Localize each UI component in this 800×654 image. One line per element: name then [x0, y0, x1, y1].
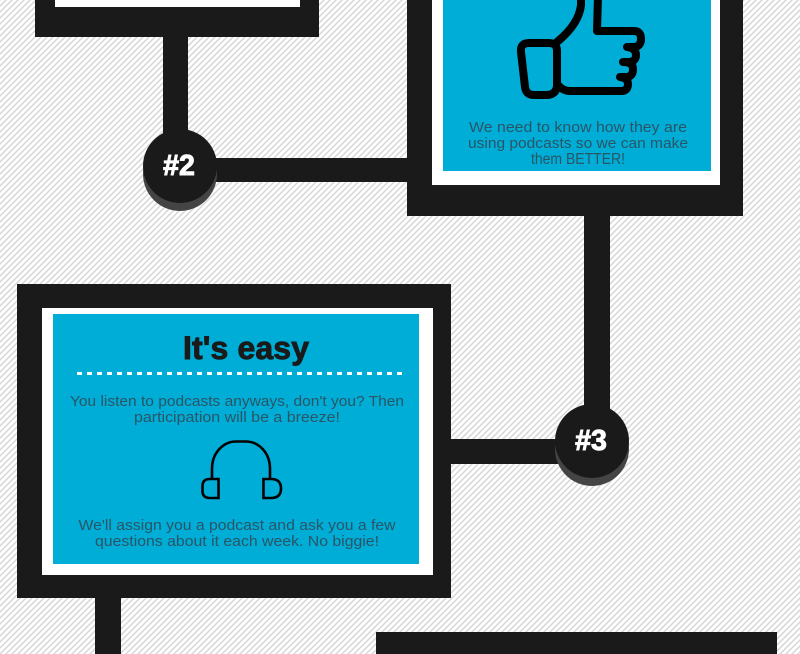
- text: assignment: [78, 518, 396, 550]
- dashed divider: [77, 372, 403, 375]
- text: intro: participation will be a breeze!: [134, 410, 340, 426]
- marker: #3: #3: [575, 425, 607, 457]
- connector: box 2 to #3: [584, 210, 610, 425]
- icon: thumbs up: [521, 0, 641, 95]
- text: intro: [70, 394, 404, 426]
- connector: #3 to box 3: [445, 439, 570, 464]
- panel: it's easy: [17, 284, 451, 598]
- connector: box 3 downward: [95, 590, 121, 654]
- text: how they use podcasts: using podcasts so we can make: [468, 136, 688, 152]
- marker: #2: [143, 129, 217, 211]
- text: how they use podcasts: them BETTER!: [531, 151, 625, 168]
- panel: why it matters: [407, 0, 743, 216]
- text: assignment: questions about it each week. No biggie!: [95, 534, 379, 550]
- connector: #2 to box 2: [200, 158, 410, 182]
- text: how they use podcasts: [468, 120, 688, 168]
- text: how they use podcasts: We need to know how they are: [469, 120, 687, 136]
- marker: #3: [555, 404, 629, 486]
- marker: #2: #2: [163, 150, 195, 182]
- icon: headphones: [202, 442, 281, 498]
- panel: next box top edge: [376, 632, 777, 654]
- connector: box 1 to #2: [163, 30, 188, 150]
- panel: top left box: [35, 0, 319, 37]
- heading: it's easy: It's easy: [183, 330, 309, 366]
- text: assignment: We'll assign you a podcast and ask you a few: [78, 518, 396, 534]
- text: intro: You listen to podcasts anyways, don't you? Then: [70, 394, 404, 410]
